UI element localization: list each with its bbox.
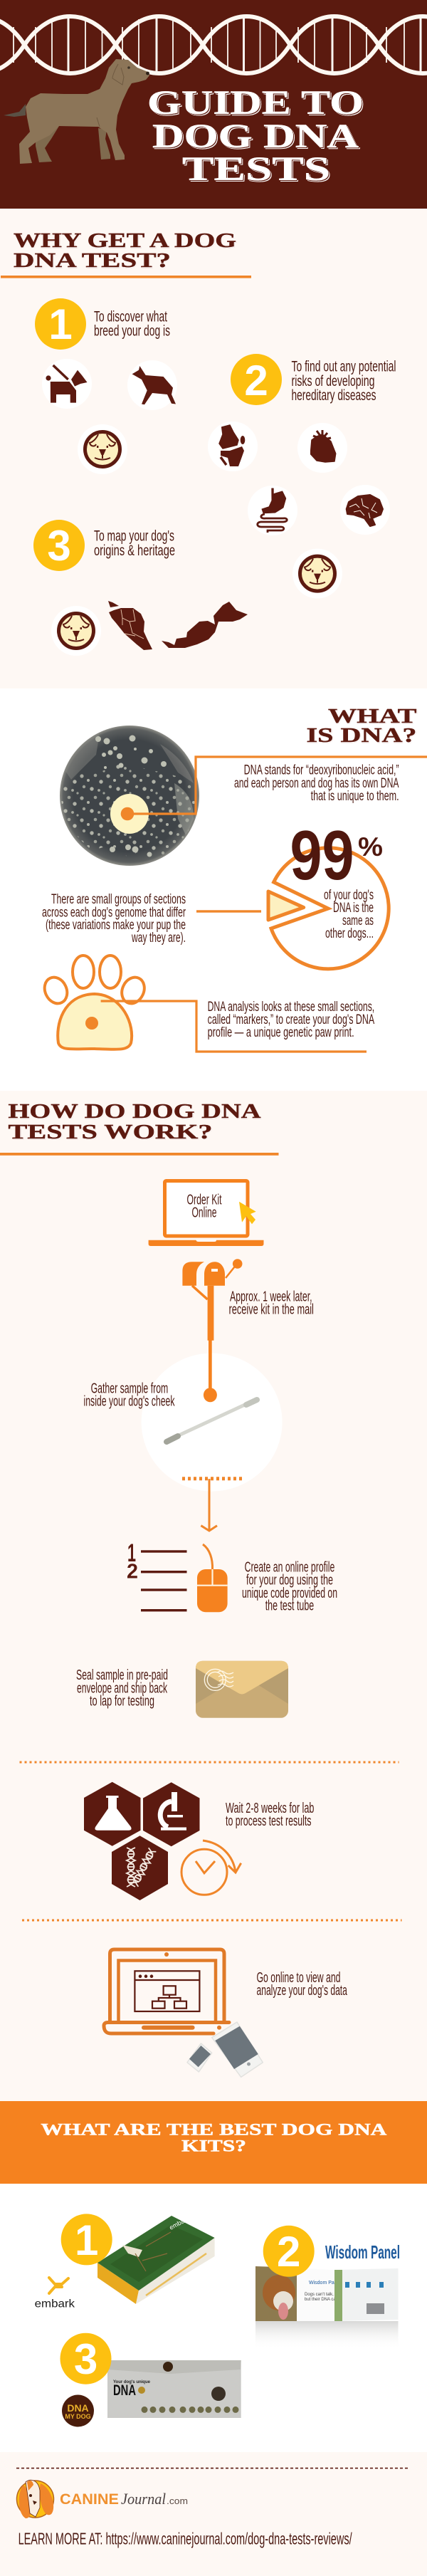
panel: best dog DNA kits xyxy=(0,2101,427,2452)
kit 3 badge xyxy=(60,2333,111,2384)
icon: envelope xyxy=(196,1661,288,1718)
image: Wisdom Panel kit box xyxy=(255,2266,399,2350)
panel: how do dog DNA tests work xyxy=(0,1100,401,2077)
text: order kit online: Order Kit xyxy=(186,1193,222,1208)
icon: mailbox xyxy=(182,1259,243,1341)
icon: microscope hexagon xyxy=(143,1782,199,1846)
icon: map of Malaysia xyxy=(108,601,248,650)
text: 99 percent caption xyxy=(324,887,374,941)
text: 99 percent caption: other dogs... xyxy=(325,926,374,941)
icon: laptop order kit xyxy=(149,1180,263,1246)
icon: heart organ xyxy=(297,423,347,473)
text: order kit online: Online xyxy=(192,1205,216,1220)
text: seal sample xyxy=(76,1667,168,1710)
text: gather sample xyxy=(84,1381,175,1409)
banner: what are the best dog DNA kits: KITS? xyxy=(181,2137,246,2154)
image: Embark kit box xyxy=(97,2215,215,2304)
text: receive kit xyxy=(229,1289,314,1318)
reason 3 text: To map your dog's xyxy=(94,528,174,545)
text: genome differences: (these variations make your pup the xyxy=(46,917,186,933)
image: Wisdom Panel kit box: but their DNA can. xyxy=(305,2298,339,2302)
callout line: paw print to markers text xyxy=(101,1001,367,1052)
icon: dog on leash xyxy=(42,359,92,409)
heading: why get a dog DNA test xyxy=(1,229,251,278)
reason 2 text xyxy=(292,359,396,404)
text: DNA definition xyxy=(234,763,399,804)
heading: what is DNA: WHAT xyxy=(328,705,417,728)
reason 3 badge: 3 xyxy=(47,522,71,570)
stat: 99 percent: % xyxy=(358,832,383,862)
text: DNA analysis: profile — a unique genetic paw print. xyxy=(208,1025,354,1040)
logo: Canine Journal xyxy=(17,2480,188,2518)
text: order kit online xyxy=(186,1193,222,1220)
image: petri dish xyxy=(60,726,199,866)
image: cotton swab xyxy=(167,1400,257,1442)
text: genome differences: way they are). xyxy=(131,930,186,946)
icon: DNA helix xyxy=(0,16,427,73)
text: create profile: Create an online profile xyxy=(245,1560,334,1576)
text: go online xyxy=(256,1970,347,1999)
text: gather sample: Gather sample from xyxy=(91,1381,168,1397)
image: DNA My Dog kit box: Your dog's unique xyxy=(113,2380,151,2384)
kit 1 badge xyxy=(61,2214,112,2265)
reason 1 text xyxy=(94,309,170,339)
icon: browser org chart xyxy=(135,1971,199,2011)
icon: computer mouse xyxy=(197,1544,228,1612)
text: DNA analysis xyxy=(208,999,374,1040)
text: wait for results xyxy=(226,1801,314,1829)
icon: dog silhouette xyxy=(127,360,177,410)
text: receive kit: Approx. 1 week later, xyxy=(230,1289,312,1305)
text: genome differences: across each dog's genome that differ xyxy=(42,904,186,920)
reason 2 text: risks of developing xyxy=(292,373,374,389)
image: Embark kit box: embark xyxy=(168,2215,191,2231)
title xyxy=(147,84,364,188)
logo: DNA My Dog: DNA xyxy=(67,2402,89,2414)
panel: what is DNA xyxy=(0,688,427,1091)
icon: clock xyxy=(181,1841,241,1895)
callout line: petri dish to DNA definition xyxy=(121,757,427,820)
heading: how do dog DNA tests work: HOW DO DOG DNA xyxy=(9,1100,261,1123)
icon: knee joint xyxy=(208,422,258,471)
reason 2 badge xyxy=(231,354,282,405)
icon: flask hexagon xyxy=(84,1782,141,1846)
icon: stomach and intestines xyxy=(248,486,297,535)
text: wait for results: Wait 2-8 weeks for lab xyxy=(226,1801,314,1816)
logo: embark: embark xyxy=(35,2298,75,2310)
dotted divider xyxy=(22,1920,401,1921)
heading: why get a dog DNA test: DNA TEST? xyxy=(14,249,171,272)
dotted line xyxy=(182,1477,243,1480)
text: gather sample: inside your dog's cheek xyxy=(84,1393,175,1409)
heading: why get a dog DNA test: WHY GET A DOG xyxy=(14,229,236,252)
icon: brown dog xyxy=(4,59,149,164)
kit 3 badge: 3 xyxy=(74,2335,97,2383)
reason 1 badge xyxy=(35,298,86,350)
icon: DNA hexagon xyxy=(112,1836,168,1900)
reason 3 badge xyxy=(33,520,85,571)
heading: how do dog DNA tests work: TESTS WORK? xyxy=(9,1121,212,1143)
image: Wisdom Panel kit box: Dogs can't talk, xyxy=(305,2293,334,2297)
text: create profile: for your dog using the xyxy=(246,1573,333,1588)
logo: Canine Journal: .com xyxy=(167,2496,188,2506)
icon: dog face xyxy=(78,424,127,474)
reason 1 text: To discover what xyxy=(94,309,167,325)
logo: Canine Journal: CANINE xyxy=(60,2491,119,2508)
text: seal sample: envelope and ship back xyxy=(77,1680,168,1696)
icon: numbered list: 1 xyxy=(127,1539,136,1567)
connector: post to swab xyxy=(204,1340,217,1402)
reason 1 badge: 1 xyxy=(48,300,73,348)
text: seal sample: to lap for testing xyxy=(90,1694,154,1710)
text: receive kit: receive kit in the mail xyxy=(229,1302,314,1318)
logo: embark xyxy=(35,2278,75,2310)
text: create profile: unique code provided on xyxy=(242,1586,337,1601)
text: create profile xyxy=(242,1560,337,1614)
dashed divider xyxy=(16,2468,408,2469)
kit 1 badge: 1 xyxy=(75,2216,98,2264)
heading: what is DNA: IS DNA? xyxy=(306,724,417,747)
white circle behind swab xyxy=(142,1353,283,1491)
icon: cursor xyxy=(239,1202,256,1224)
text: genome differences xyxy=(42,891,186,946)
panel: why get a dog DNA test xyxy=(1,229,396,656)
reason 1 text: breed your dog is xyxy=(94,323,170,339)
icon: dog face xyxy=(292,549,342,599)
text: create profile: the test tube xyxy=(265,1598,314,1614)
kit 2 badge: 2 xyxy=(277,2228,300,2276)
logo: DNA My Dog xyxy=(62,2395,94,2426)
reason 3 text: origins & heritage xyxy=(94,543,175,559)
icon: paw print xyxy=(41,955,149,1049)
banner: what are the best dog DNA kits: WHAT ARE THE BEST DOG DNA xyxy=(41,2120,387,2138)
kit 2 badge xyxy=(263,2226,315,2277)
heading: how do dog DNA tests work xyxy=(0,1100,279,1156)
text: wait for results: to process test results xyxy=(226,1813,312,1829)
icons: lab hexagons xyxy=(84,1782,199,1900)
heading: what is DNA xyxy=(306,705,417,747)
text: seal sample: Seal sample in pre-paid xyxy=(76,1667,168,1683)
arrow: down to profile step xyxy=(201,1479,217,1531)
icon: numbered list: 2 xyxy=(127,1561,138,1583)
panel: footer xyxy=(16,2468,408,2548)
title: GUIDE TO xyxy=(147,84,364,122)
text: 99 percent caption: DNA is the xyxy=(333,900,374,916)
reason 2 text: hereditary diseases xyxy=(292,387,376,404)
chart: 99 percent pie xyxy=(196,816,389,969)
reason 3 text xyxy=(94,528,175,559)
panel: header xyxy=(0,0,427,209)
icon: tablet and phone xyxy=(187,2022,263,2077)
text: go online: analyze your dog's data xyxy=(256,1983,347,1999)
icon: numbered list xyxy=(127,1539,186,1611)
reason 2 badge: 2 xyxy=(244,357,268,404)
stat: 99 percent: 99 xyxy=(290,816,354,894)
text: go online: Go online to view and xyxy=(256,1970,340,1986)
icon: brain xyxy=(340,485,390,535)
banner: what are the best dog DNA kits xyxy=(0,2101,427,2184)
icon: laptop with data xyxy=(104,1949,229,2033)
logo: Canine Journal: Journal xyxy=(121,2490,166,2508)
text: 99 percent caption: same as xyxy=(342,913,374,928)
icon: dog face xyxy=(51,606,101,656)
text: genome differences: There are small groups of sections xyxy=(51,891,186,907)
title: TESTS xyxy=(182,150,330,188)
image: DNA My Dog kit box xyxy=(107,2360,241,2418)
logo: DNA My Dog: MY DOG xyxy=(65,2413,91,2420)
text: 99 percent caption: of your dog's xyxy=(324,887,374,903)
image: DNA My Dog kit box: DNA xyxy=(113,2382,136,2399)
dotted divider xyxy=(20,1761,399,1763)
image: Wisdom Panel kit box: Wisdom Panel xyxy=(309,2281,342,2286)
title: DOG DNA xyxy=(152,117,359,155)
